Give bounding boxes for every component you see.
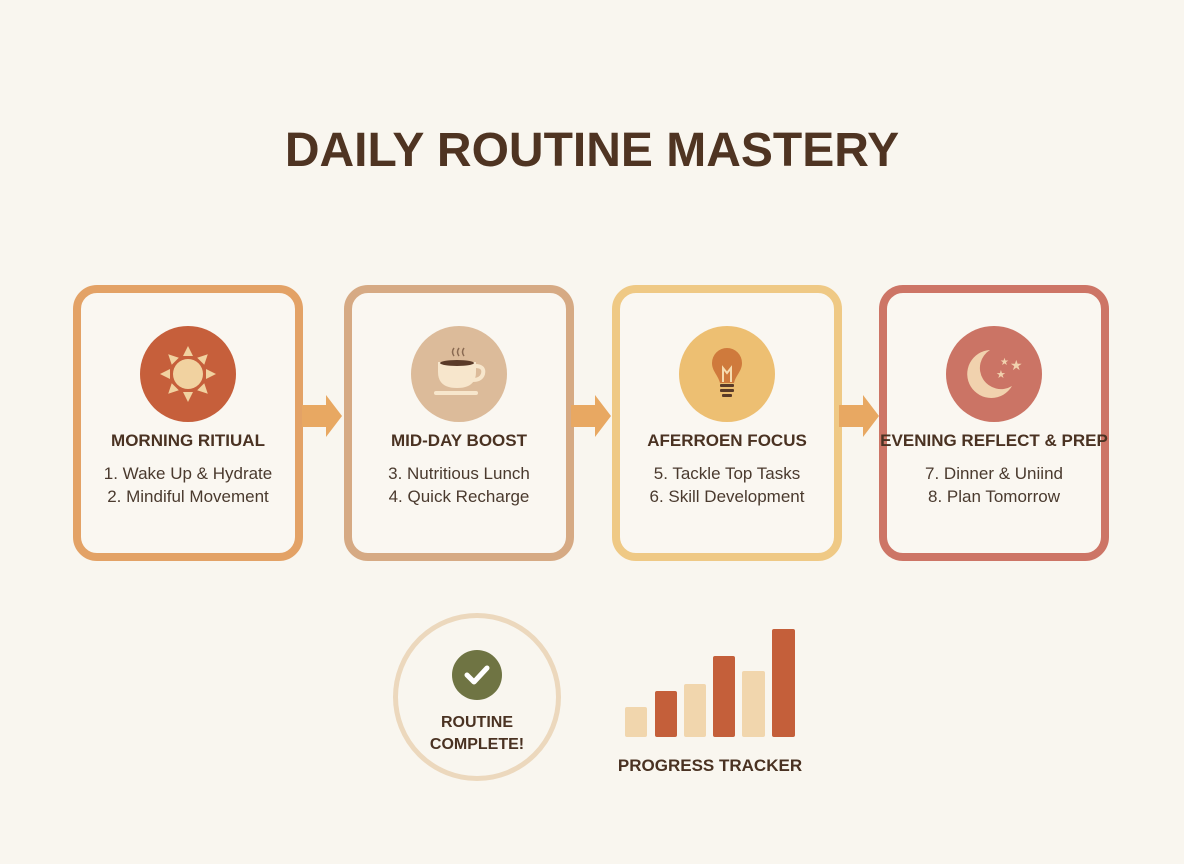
list: [388, 464, 530, 506]
heading: MORNING RITIUAL: [111, 431, 265, 450]
badge: routine complete: [393, 613, 561, 781]
heading: EVENING REFLECT & PREP: [880, 431, 1108, 450]
bar chart: progress tracker: [618, 629, 802, 775]
icon: bulb: [679, 326, 775, 422]
list: 1. Wake Up & Hydrate: [104, 464, 272, 483]
list: 5. Tackle Top Tasks: [654, 464, 800, 483]
list: 6. Skill Development: [650, 487, 804, 506]
arrow 1: [303, 395, 342, 437]
icon: check: [452, 650, 502, 700]
list: 3. Nutritious Lunch: [388, 464, 530, 483]
arrow 3: [839, 395, 879, 437]
list: [650, 464, 804, 506]
chart label: PROGRESS TRACKER: [618, 756, 802, 775]
icon: coffee: [411, 326, 507, 422]
arrow 2: [571, 395, 611, 437]
title: DAILY ROUTINE MASTERY: [285, 124, 899, 177]
list: 7. Dinner & Uniind: [925, 464, 1063, 483]
icon: moon: ★: [996, 369, 1006, 381]
badge text: ROUTINE: [441, 714, 513, 731]
list: 8. Plan Tomorrow: [928, 487, 1060, 506]
panel: afternoon: [612, 285, 842, 561]
badge text: [430, 714, 524, 753]
panel: evening: [879, 285, 1109, 561]
list: [104, 464, 272, 506]
icon: moon: [946, 326, 1042, 422]
icon: moon: ★: [1000, 357, 1009, 368]
heading: AFERROEN FOCUS: [647, 431, 807, 450]
panel: midday: [344, 285, 574, 561]
icon: moon: ★: [1010, 357, 1023, 373]
heading: MID-DAY BOOST: [391, 431, 527, 450]
list: 4. Quick Recharge: [389, 487, 529, 506]
list: 2. Mindiful Movement: [107, 487, 269, 506]
icon: sun: [140, 326, 236, 422]
badge text: COMPLETE!: [430, 736, 524, 753]
list: [925, 464, 1063, 506]
panel: morning: [73, 285, 303, 561]
